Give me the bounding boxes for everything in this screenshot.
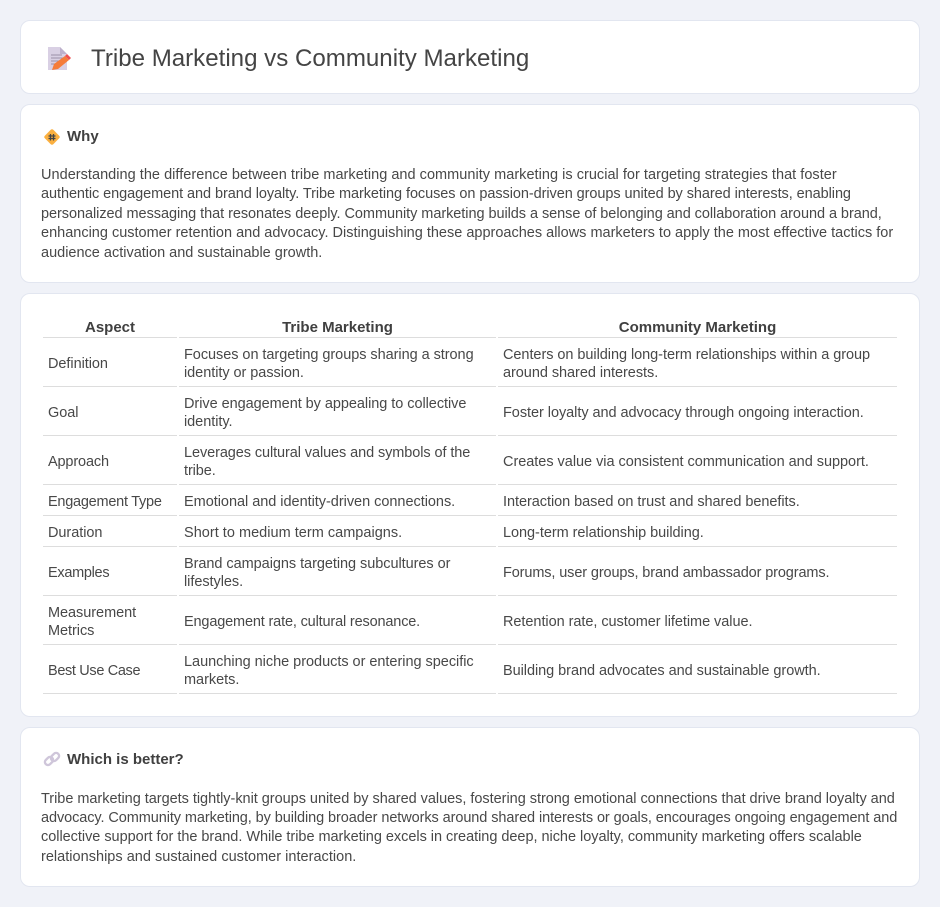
title: Tribe Marketing vs Community Marketing [91,45,529,72]
text block: why paragraph: personalized messaging that resonates deeply. Community marketing builds a sense of belonging and collaboration around a brand, [41,206,882,222]
row: best use case [48,654,821,688]
text block: which is better paragraph [41,791,897,865]
row: approach: tribe. [184,463,216,479]
row: examples: Examples [48,565,109,581]
row: examples: Forums, user groups, brand ambassador programs. [503,565,829,581]
row: goal: Foster loyalty and advocacy through ongoing interaction. [503,405,864,421]
text block: which is better paragraph: relationships and sustained customer interaction. [41,849,356,865]
row: engagement type: Engagement Type [48,494,162,510]
row: measurement metrics: Metrics [48,623,94,639]
icon: link [44,752,60,766]
row: duration: Long-term relationship building. [503,525,704,541]
row: goal [48,396,864,430]
text block: why paragraph: enhancing customer retention and advocacy. Distinguishing these approaches allows marketers to apply the most effective tactics for [41,225,893,241]
text block: why paragraph: audience activation and sustainable growth. [41,245,322,261]
panel: which is better card [20,727,920,887]
text block: why paragraph [41,167,893,261]
row: approach: Approach [48,454,109,470]
row: duration: Duration [48,525,102,541]
panel: why card [20,104,920,283]
row: engagement type [48,494,800,510]
table header: community marketing: Community Marketing [619,319,776,336]
table header: aspect: Aspect [85,319,135,336]
text block: which is better paragraph: advocacy. Community marketing, by building broader networks around shared interests or goals, encourages ongoing engagement and [41,810,897,826]
row: duration: Short to medium term campaigns. [184,525,402,541]
text block: which is better paragraph: collective support for the brand. While tribe marketing excels in creating deep, niche loyalty, community marketing offers scalable [41,829,862,845]
comparison table [43,319,897,694]
row: definition: Centers on building long-term relationships within a group [503,347,870,363]
icon: document with pencil [48,47,71,70]
icon: diamond sign [44,129,60,145]
row: approach: Leverages cultural values and symbols of the [184,445,470,461]
row: duration [48,525,704,541]
row: measurement metrics: Measurement [48,605,136,621]
row: measurement metrics [48,605,752,639]
row: definition: Focuses on targeting groups sharing a strong [184,347,474,363]
row: approach: Creates value via consistent communication and support. [503,454,869,470]
text block: why paragraph: Understanding the difference between tribe marketing and community marketing is crucial for targeting strategies that foster [41,167,837,183]
row: examples: lifestyles. [184,574,243,590]
text block: which is better paragraph: Tribe marketing targets tightly-knit groups united by shared values, fostering strong emotional connections that drive brand loyalty and [41,791,895,807]
row: goal: Goal [48,405,78,421]
row: definition: Definition [48,356,108,372]
row: engagement type: Interaction based on trust and shared benefits. [503,494,800,510]
row: goal: Drive engagement by appealing to collective [184,396,466,412]
row: measurement metrics: Retention rate, customer lifetime value. [503,614,752,630]
row: best use case: Launching niche products or entering specific [184,654,474,670]
row: definition: around shared interests. [503,365,658,381]
row: best use case: markets. [184,672,239,688]
row: examples [48,556,829,590]
heading: which is better: Which is better? [67,751,184,768]
panel: comparison table card [20,293,920,717]
table header: tribe marketing: Tribe Marketing [282,319,393,336]
row: best use case: Building brand advocates and sustainable growth. [503,663,821,679]
panel: title card [20,20,920,94]
heading: why: Why [67,128,99,145]
row: measurement metrics: Engagement rate, cultural resonance. [184,614,420,630]
row: examples: Brand campaigns targeting subcultures or [184,556,450,572]
text block: why paragraph: authentic engagement and brand loyalty. Tribe marketing focuses on passion-driven groups united by shared interests, enabling [41,186,851,202]
row: engagement type: Emotional and identity-driven connections. [184,494,455,510]
row: definition [48,347,870,381]
row: definition: identity or passion. [184,365,304,381]
row: goal: identity. [184,414,232,430]
row: best use case: Best Use Case [48,663,140,679]
row: approach [48,445,869,479]
